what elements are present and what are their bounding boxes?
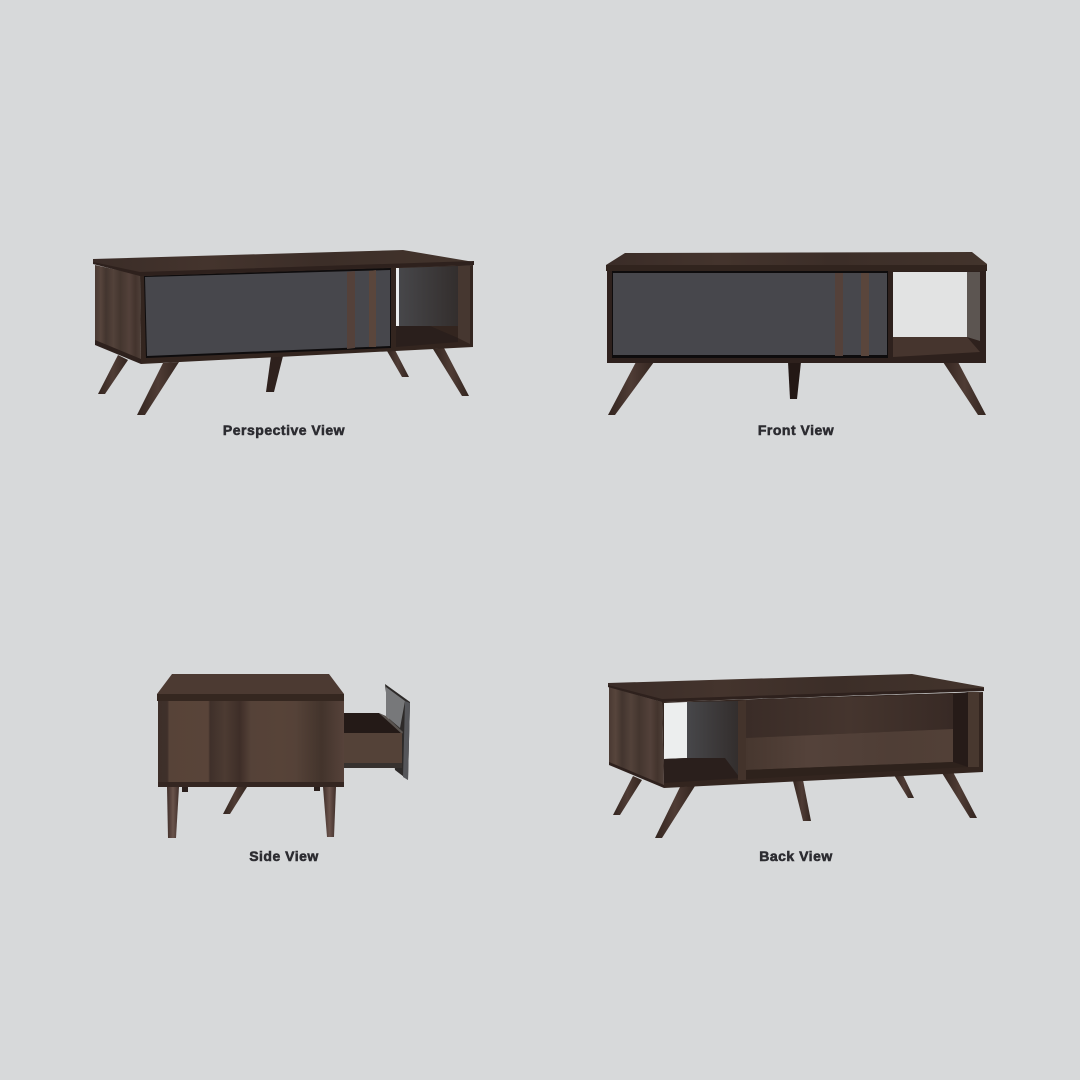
shelf opening xyxy=(396,268,399,326)
back panel xyxy=(746,694,953,738)
drawer stripes xyxy=(835,273,843,356)
label: perspective view: Perspective View xyxy=(223,422,345,438)
legs: side view xyxy=(167,787,336,838)
side panel xyxy=(609,687,664,787)
label: front view: Front View xyxy=(758,422,834,438)
panel: front view xyxy=(606,252,987,415)
drawer stripes xyxy=(347,271,355,349)
open compartment xyxy=(664,702,687,759)
top xyxy=(606,252,987,271)
top xyxy=(93,250,474,276)
legs: back view xyxy=(613,772,977,838)
side body xyxy=(158,701,344,783)
legs: perspective view xyxy=(98,348,469,415)
back frame xyxy=(662,692,983,788)
drawer front xyxy=(612,271,888,358)
top xyxy=(157,674,344,701)
side panel xyxy=(95,265,141,363)
shelf opening xyxy=(893,272,967,337)
top xyxy=(608,674,984,702)
bottom band xyxy=(158,782,344,787)
front frame xyxy=(140,265,473,364)
open drawer xyxy=(344,684,410,780)
legs: front view xyxy=(608,362,986,415)
body frame xyxy=(607,270,986,363)
panel: side view xyxy=(157,674,410,838)
panel: back view xyxy=(608,674,984,838)
panel: perspective view xyxy=(93,250,474,415)
drawer front xyxy=(144,268,391,358)
label: side view: Side View xyxy=(249,848,319,864)
label: back view: Back View xyxy=(759,848,833,864)
